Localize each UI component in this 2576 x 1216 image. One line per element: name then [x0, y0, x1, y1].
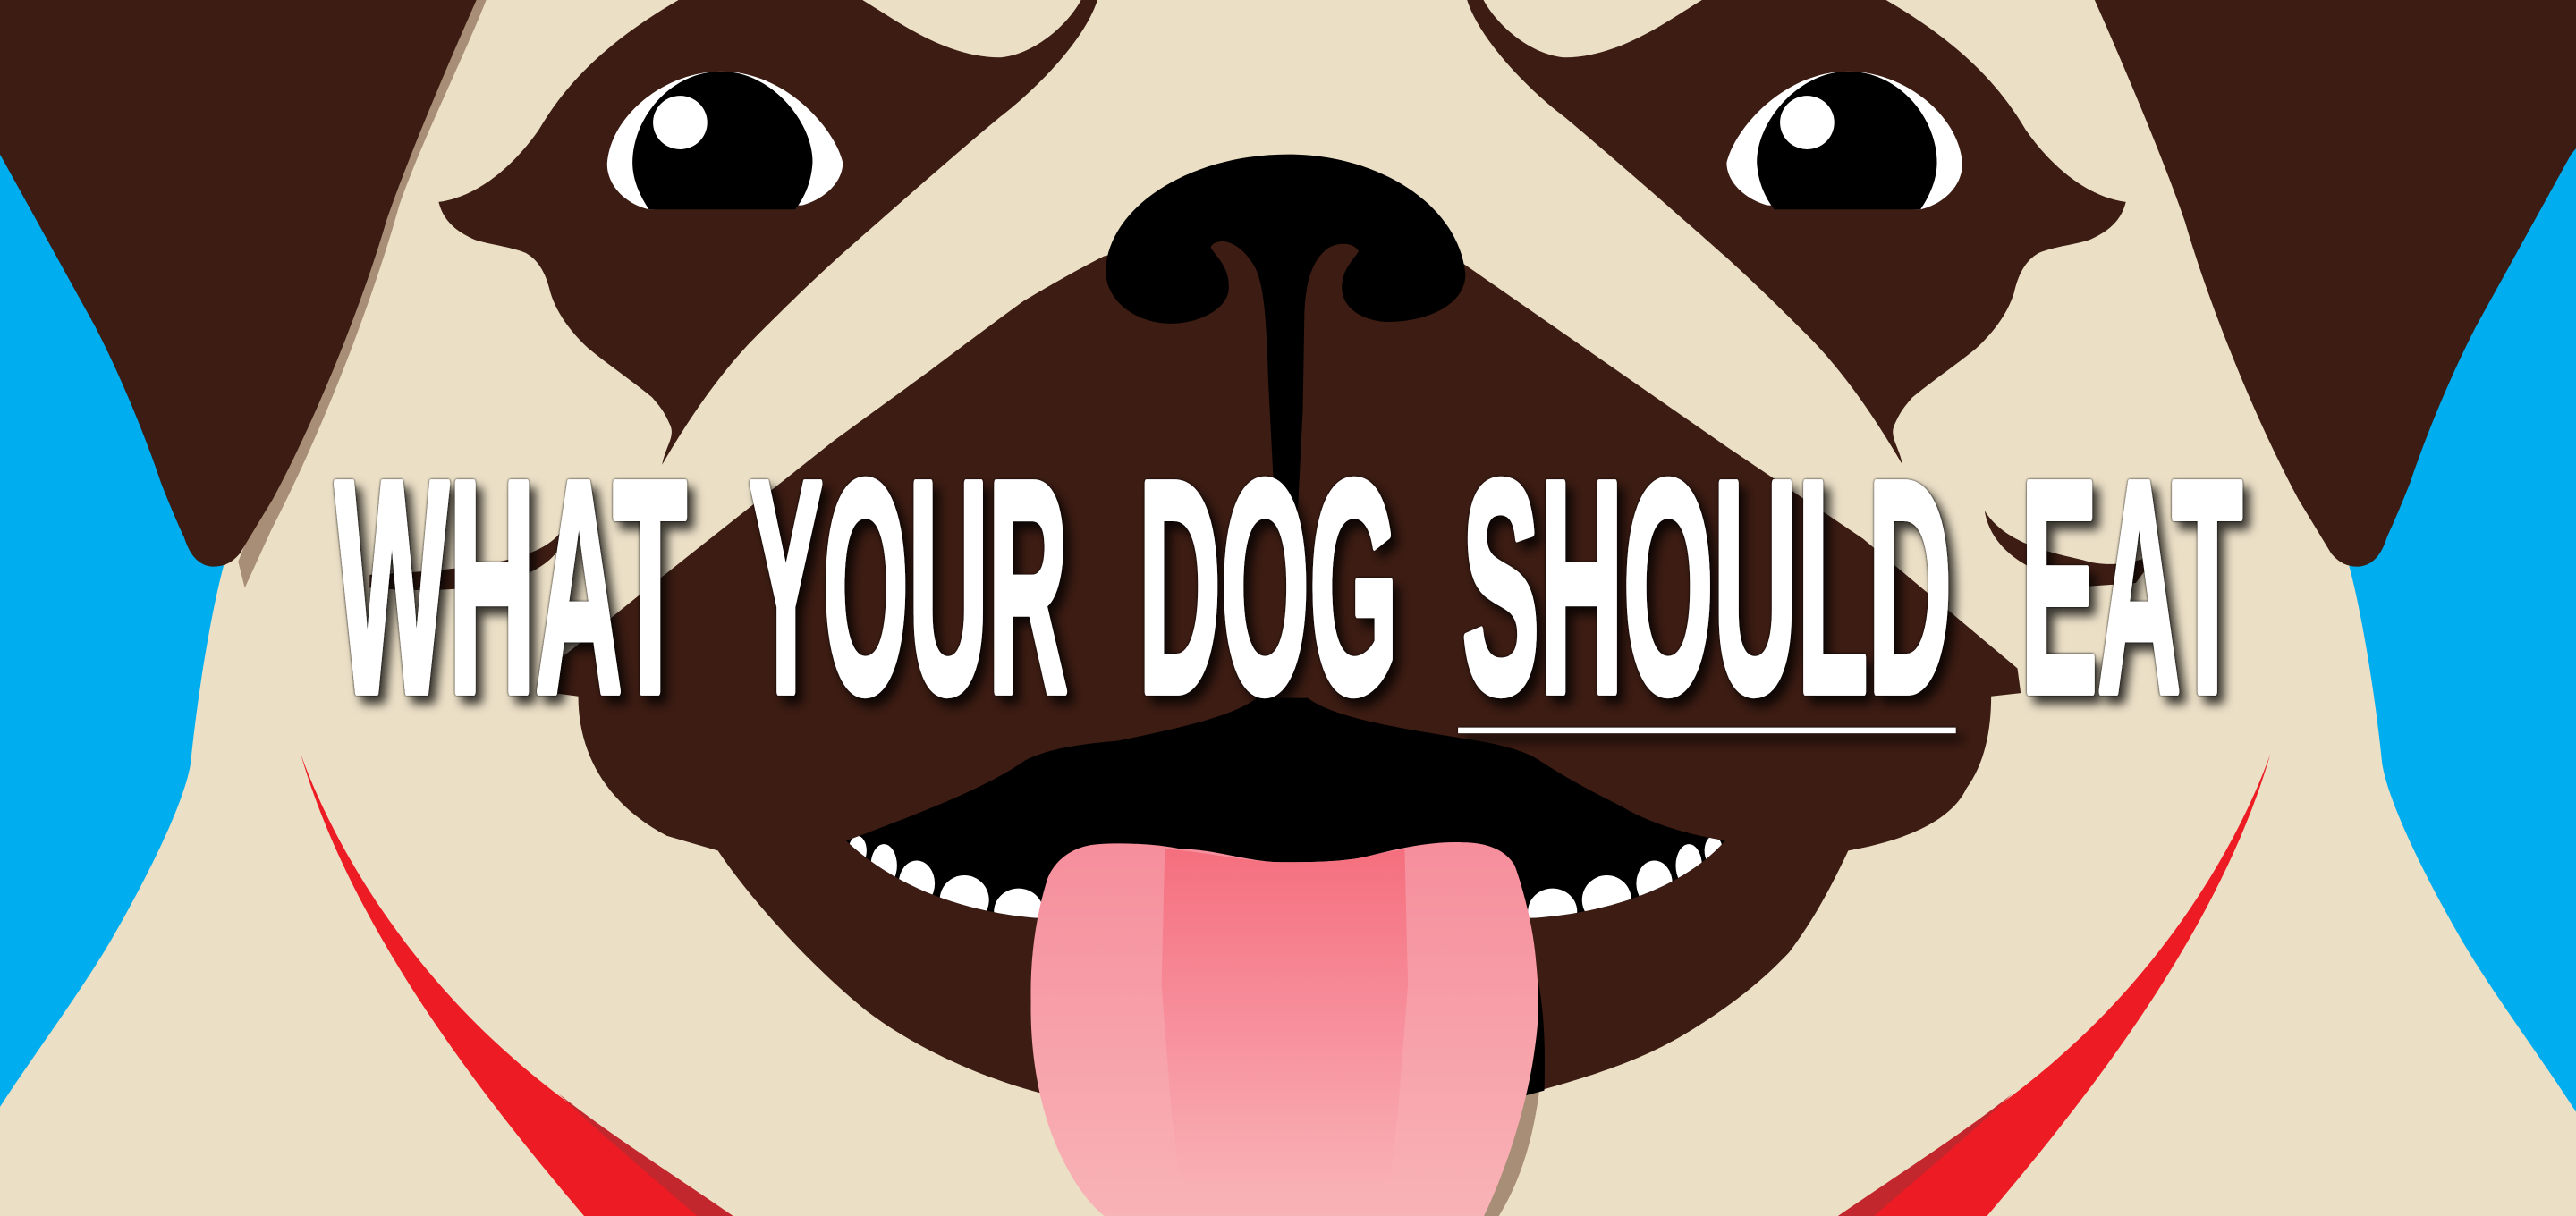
cheek wrinkle right [1985, 511, 2160, 587]
red collar right dark edge [1836, 1094, 2012, 1216]
mouth [846, 698, 1725, 918]
ear left [0, 0, 477, 567]
red collar left [301, 754, 734, 1216]
title [335, 418, 2242, 756]
cheek wrinkle left [369, 522, 567, 590]
nose [1106, 155, 1465, 509]
tongue dark edge [1520, 969, 1545, 1097]
red collar right [1836, 754, 2270, 1216]
ear shadow left [238, 0, 487, 588]
tongue [1030, 842, 1538, 1216]
title: YOUR [750, 418, 1068, 756]
ear right [2095, 0, 2576, 567]
teeth [850, 836, 1722, 918]
tongue centre groove [1162, 849, 1408, 1182]
eye left [607, 72, 843, 209]
title: WHAT [335, 418, 687, 756]
red collar left dark edge [558, 1094, 734, 1216]
eye patch left [438, 0, 1097, 465]
muzzle [540, 214, 2021, 1094]
title underline [1458, 728, 1956, 733]
eye right [1726, 72, 1962, 209]
tongue shadow [1470, 1091, 1539, 1216]
eye patch right [1467, 0, 2126, 465]
title: DOG [1139, 418, 1398, 756]
